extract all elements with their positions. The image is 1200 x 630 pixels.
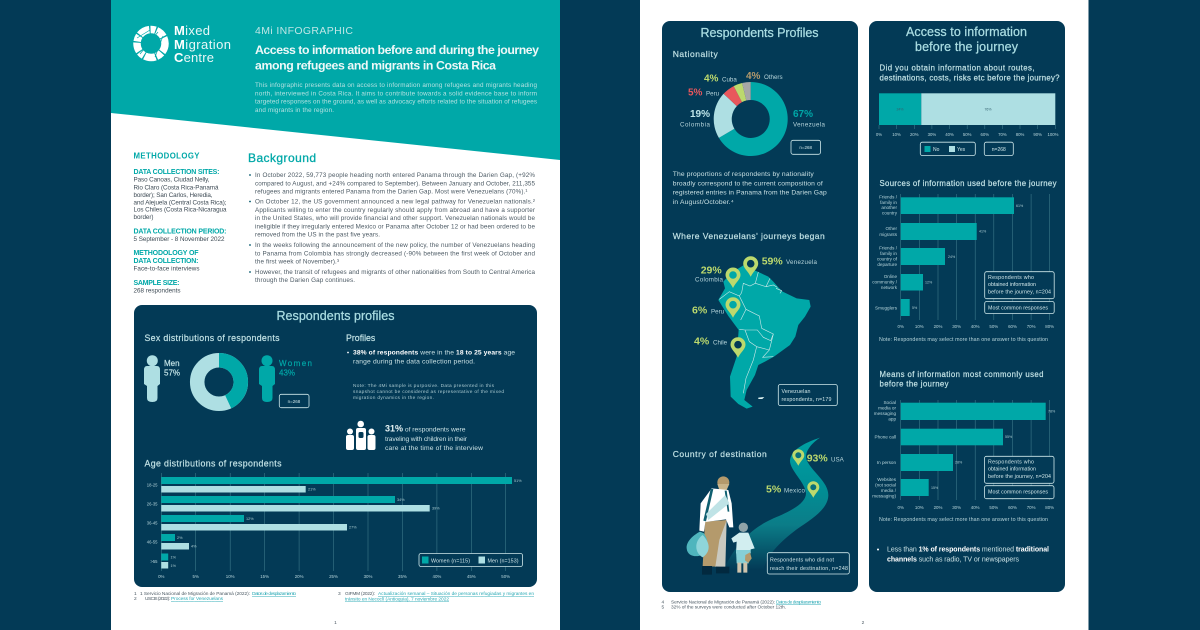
sample box: n=268: [799, 145, 813, 150]
sample note: migration dynamics in the region.: [353, 395, 434, 401]
sources chart: family in: [880, 200, 897, 205]
methodology: 268 respondents: [134, 288, 180, 294]
background bullets: Applicants willing to enter the country regularly should apply from abroad and have a supporter: [255, 207, 535, 214]
profiles bullet: 38% of respondents were in the 18 to 25 years age: [353, 350, 515, 356]
age chart: 30%: [364, 574, 372, 579]
destination labels: Mexico: [784, 488, 806, 494]
icon: man: [144, 355, 160, 402]
sources chart: 50%: [989, 324, 998, 329]
logo: Centre: [174, 50, 214, 65]
age chart: 39%: [432, 506, 440, 510]
map labels: 6%: [692, 304, 708, 316]
means chart: 80%: [1045, 505, 1054, 510]
means callouts: before the journey, n=204: [988, 474, 1051, 480]
sex distribution heading: Sex distributions of respondents: [144, 333, 280, 343]
age chart: 26-35: [147, 502, 158, 506]
stacked bar chart: 90%: [1033, 132, 1042, 137]
sources chart: 61%: [1016, 204, 1024, 208]
methodology: DATA COLLECTION SITES:: [134, 169, 220, 176]
means chart: 70%: [1027, 505, 1036, 510]
nationality labels: 4%: [746, 71, 761, 82]
logo: Migration: [174, 37, 231, 52]
sources chart: 20%: [934, 324, 942, 329]
age heading: Age distributions of respondents: [144, 458, 282, 468]
stacked bar chart: 30%: [928, 132, 936, 137]
background heading: Background: [248, 151, 316, 165]
map pins: [726, 256, 758, 358]
means chart: 55%: [1005, 435, 1013, 439]
age chart: 36-45: [147, 520, 158, 526]
footnotes page 2: Servicio Nacional de Migración de Panamá (2022):: [671, 600, 775, 606]
stacked bar chart: 24%: [896, 108, 904, 112]
panel title: [906, 25, 1027, 54]
intro text: and migrants in the region.: [255, 107, 334, 114]
sources chart: Other: [886, 226, 897, 231]
means note: Note: Respondents may select more than one answer to this question: [879, 517, 1048, 523]
means chart: 10%: [915, 505, 924, 510]
sources chart: Online: [884, 274, 897, 279]
means chart: Social: [883, 400, 896, 405]
destination sample box: reach their destination, n=248: [770, 566, 848, 572]
destination sample box: Respondents who did not: [770, 558, 835, 564]
logo: [137, 23, 231, 65]
header banner: [111, 0, 560, 160]
background bullets: ineligible if they irregularly entered Mexico or Panama after October 12 or had been ordered to be: [255, 223, 535, 230]
nationality labels: 19%: [690, 109, 710, 120]
footnotes page 2: 4: [662, 600, 664, 606]
means chart: messaging: [874, 411, 896, 416]
footnotes page 1: Datos de desplazamiento: [252, 591, 296, 597]
methodology: METHODOLOGY OF: [134, 250, 199, 257]
map labels: Venezuela: [786, 259, 818, 266]
map sample box: Venezuelan: [782, 389, 811, 395]
methodology: SAMPLE SIZE:: [134, 280, 180, 287]
age legend: [419, 554, 522, 566]
age chart: 50%: [501, 574, 510, 579]
destination labels: USA: [831, 456, 845, 464]
destination heading: Country of destination: [673, 449, 767, 459]
age chart: 40%: [433, 574, 441, 579]
children statistic: traveling with children in their: [385, 436, 468, 443]
age chart: 0%: [158, 574, 165, 579]
journeys heading: Where Venezuelans' journeys began: [673, 231, 825, 241]
sources chart: another: [881, 205, 897, 210]
means heading: before the journey: [880, 380, 949, 388]
means chart: In person: [877, 460, 896, 465]
age chart: 1%: [170, 556, 177, 560]
stacked bar chart: 0%: [876, 132, 882, 137]
report label: 4Mi INFOGRAPHIC: [255, 25, 353, 37]
background bullets: compared to August, and +24% compared to September). Between January and October, 211,355: [255, 180, 535, 188]
women label: Women: [279, 359, 312, 368]
sources chart: 12%: [925, 280, 933, 284]
means callouts: obtained information: [988, 466, 1036, 472]
page number 1: 1: [334, 620, 337, 626]
sources callouts: before the journey, n=204: [988, 290, 1051, 296]
map labels: Colombia: [695, 276, 724, 284]
page 1: [111, 0, 560, 630]
means chart: media /: [881, 488, 897, 493]
sample note: snapshot cannot be considered as representative of the mixed: [353, 389, 504, 395]
traditional channels bullet: Less than 1% of respondents mentioned traditional: [887, 546, 1049, 554]
means chart: media or: [878, 406, 896, 410]
age chart: 51%: [514, 479, 522, 483]
nationality labels: [680, 71, 826, 128]
sample box: n=268: [288, 399, 301, 404]
means chart: messaging): [872, 494, 896, 498]
map labels: Chile: [713, 340, 728, 346]
map labels: [692, 256, 818, 348]
background bullets: In the weeks following the announcement of the new policy, the number of Venezuelans heading: [255, 242, 535, 249]
age chart: 34%: [397, 498, 405, 502]
sources callouts: Respondents who: [988, 275, 1034, 281]
means chart: Phone call: [875, 434, 896, 440]
destination labels: 5%: [766, 484, 782, 496]
panel: access to information: [869, 21, 1065, 592]
footnotes page 2: Datos de desplazamiento: [776, 600, 821, 606]
nationality labels: Venezuela: [793, 122, 826, 128]
means chart: 50%: [989, 505, 998, 510]
intro text: This infographic presents data on access to information among refugees and migrants heading: [255, 82, 537, 89]
age chart: 2%: [177, 536, 183, 540]
map labels: 59%: [762, 256, 783, 268]
road illustration: [723, 438, 828, 570]
age chart: 1%: [170, 564, 177, 568]
age chart: 25%: [329, 574, 338, 579]
panel title: Access to information: [906, 25, 1027, 39]
sources chart: 10%: [915, 324, 924, 329]
donut: nationality: [714, 82, 788, 156]
men label: Men: [164, 359, 180, 368]
footnotes page 1: 3: [338, 591, 341, 597]
panel: respondents profiles left: [662, 21, 858, 592]
page number 2: 2: [862, 620, 865, 626]
map sample box: respondents, n=179: [782, 397, 832, 403]
age chart: 45%: [467, 574, 476, 579]
methodology: METHODOLOGY: [134, 152, 200, 160]
profiles bullet: [347, 350, 515, 366]
nationality paragraph: [673, 171, 827, 206]
sample box: [279, 394, 309, 408]
stacked bar chart: 20%: [910, 132, 919, 137]
footnotes page 1: [134, 591, 534, 602]
traditional channels bullet: channels such as radio, TV or newspapers: [887, 556, 1020, 563]
means heading: Means of information most commonly used: [880, 370, 1044, 379]
sources chart: 80%: [1045, 324, 1054, 329]
age chart: 27%: [349, 526, 357, 530]
nationality paragraph: registered entries in Panama from the Darien Gap: [673, 190, 827, 196]
methodology: border): [134, 214, 154, 221]
logo: Mixed: [174, 23, 210, 38]
footnotes page 2: 32% of the surveys were conducted after October 12th.: [671, 604, 786, 610]
icon: woman: [259, 355, 275, 402]
background bullets: in the United States, who will provide financial and other support. Venezuelan nationals would be: [255, 215, 535, 222]
sample note: [353, 383, 504, 401]
nationality labels: Colombia: [680, 122, 711, 128]
age chart: 46-55: [147, 540, 158, 544]
map labels: 29%: [701, 264, 722, 276]
age chart: 15%: [260, 574, 269, 579]
children statistic: care at the time of the interview: [385, 445, 483, 452]
sample note: Note: The 4Mi sample is purposive. Data presented in this: [353, 383, 495, 389]
sources chart: network: [881, 285, 898, 290]
sources chart: family in: [880, 251, 897, 256]
sources chart: migrants: [879, 232, 898, 237]
sources chart: 40%: [971, 324, 980, 329]
children statistic: 31% of respondents were: [385, 424, 466, 434]
means chart: 60%: [1008, 505, 1017, 510]
footnotes page 1: GIFMM (2022):: [345, 591, 375, 597]
means chart: 78%: [1048, 410, 1056, 414]
means callouts: Most common responses: [988, 490, 1048, 496]
means chart: (not social: [875, 482, 896, 488]
question: Did you obtain information about routes,: [880, 64, 1034, 72]
panel title: before the journey: [915, 40, 1019, 54]
means heading: [880, 370, 1044, 388]
sources chart: Smugglers: [875, 306, 898, 310]
title: [255, 43, 539, 72]
stacked bar chart: 100%: [1048, 132, 1059, 137]
sources note: Note: Respondents may select more than one answer to this question: [879, 337, 1048, 343]
panel title: Respondents Profiles: [700, 26, 818, 40]
methodology: DATA COLLECTION PERIOD:: [134, 228, 226, 236]
title: among refugees and migrants in Costa Rica: [255, 58, 496, 72]
footnotes page 2: 5: [662, 604, 664, 610]
footnotes page 1: USCIS (2022):: [145, 596, 170, 602]
methodology: and Alejuela (Central Costa Rica);: [134, 199, 227, 206]
sources chart: country of: [877, 256, 898, 262]
panel title: Respondents profiles: [276, 309, 394, 323]
means chart: 28%: [955, 460, 963, 464]
destination labels: [766, 452, 845, 496]
sample box: [984, 142, 1013, 156]
background bullets: [249, 172, 535, 284]
means chart: 30%: [952, 505, 961, 510]
stacked bar chart: [876, 93, 1059, 137]
illustration: adult and child: [687, 476, 755, 575]
nationality heading: Nationality: [673, 49, 718, 59]
footnotes page 1: 2: [134, 596, 137, 602]
methodology: DATA COLLECTION:: [134, 258, 198, 265]
means callouts: [984, 456, 1054, 499]
map labels: 4%: [694, 336, 710, 348]
sources chart: 30%: [952, 324, 961, 329]
age chart: >55: [150, 559, 158, 564]
sources chart: departure: [877, 262, 897, 267]
methodology: Rio Claro (Costa Rica-Panamá: [134, 184, 219, 191]
icon: family: [346, 421, 376, 450]
means chart: 20%: [934, 505, 942, 510]
background bullets: refugees and migrants entered Panama from the Darien Gap. Most were Venezuelans (70%).¹: [255, 188, 528, 196]
sources chart: community /: [872, 280, 898, 284]
sources callouts: obtained information: [988, 282, 1036, 288]
destination pins: [792, 449, 819, 498]
sources chart: [872, 194, 1054, 329]
background bullets: However, the transit of refugees and migrants of other nationalities from South to Central America: [255, 269, 535, 276]
question: destinations, costs, risks etc before the journey?: [880, 74, 1060, 82]
men label: [164, 359, 180, 378]
means chart: 40%: [971, 505, 980, 510]
nationality labels: Others: [764, 74, 783, 81]
age chart: 21%: [308, 488, 316, 492]
age chart: 4%: [191, 544, 197, 548]
sample box: n=268: [992, 147, 1006, 153]
children statistic: [385, 424, 483, 452]
methodology: Los Chiles (Costa Rica-Nicaragua: [134, 207, 227, 214]
sources chart: 24%: [948, 255, 956, 259]
age chart: 5%: [193, 574, 199, 579]
stacked bar chart: 60%: [980, 132, 989, 137]
footnotes page 2: [662, 600, 821, 610]
nationality paragraph: broadly correspond to the current composition of: [673, 180, 823, 188]
background bullets: On October 12, the US government announced a new legal pathway for Venezuelan nationals.²: [255, 198, 535, 206]
legend: Yes: [957, 147, 966, 153]
women label: [279, 359, 312, 378]
sources chart: 70%: [1027, 324, 1036, 329]
means chart: Websites: [877, 477, 897, 482]
age chart: 35%: [398, 574, 407, 579]
age chart: [147, 473, 522, 579]
means callouts: Respondents who: [988, 460, 1034, 466]
destination sample box: [767, 553, 849, 574]
stacked bar chart: 10%: [892, 132, 901, 137]
title: Access to information before and during the journey: [255, 43, 539, 57]
women label: 43%: [279, 368, 295, 378]
age legend: Men (n=153): [488, 558, 519, 564]
sources chart: country: [882, 210, 898, 216]
nationality labels: 67%: [793, 109, 813, 120]
question: [880, 64, 1060, 82]
donut: sex: [197, 360, 241, 404]
age chart: 12%: [246, 517, 254, 521]
sources callouts: Most common responses: [988, 306, 1048, 312]
page 2: [640, 0, 1088, 630]
traditional channels bullet: [877, 546, 1049, 563]
men label: 57%: [164, 368, 180, 378]
nationality labels: Peru: [706, 90, 720, 98]
sources chart: 5%: [912, 306, 918, 310]
panel: respondents profiles: [134, 305, 537, 587]
sources chart: Friends /: [879, 194, 898, 200]
footnotes page 1: 1 Servicio Nacional de Migración de Panamá (2022):: [140, 591, 250, 597]
means chart: 15%: [931, 486, 939, 490]
stacked bar chart: 80%: [1016, 132, 1024, 137]
destination labels: 93%: [807, 452, 828, 464]
stacked bar chart: 40%: [945, 132, 954, 137]
means chart: app: [888, 416, 896, 422]
age chart: 20%: [295, 574, 304, 579]
footnotes page 1: Actualización semanal – Situación de personas refugiadas y migrantes en: [378, 591, 534, 597]
footnotes page 1: tránsito en Necoclí (Antioquia), 7 noviembre 2022: [345, 596, 449, 602]
intro text: targeted responses on the ground, as well as advocacy efforts related to the situation of refugees: [255, 98, 537, 106]
legend: No: [933, 147, 940, 153]
background bullets: removed from the US in the past five years.: [255, 232, 380, 238]
methodology: [134, 152, 227, 294]
methodology: Face-to-face interviews: [134, 266, 200, 272]
sources callouts: [985, 272, 1054, 314]
legend: [920, 142, 975, 156]
footnotes page 1: 1: [134, 591, 137, 597]
sources chart: 60%: [1008, 324, 1017, 329]
methodology: border); San Carlos, Heredia,: [134, 192, 213, 199]
background bullets: to Panama from Colombia has strongly decreased (-90% between the first week of October and: [255, 250, 535, 257]
intro text: north, interviewed in Costa Rica. It aims to contribute towards a solid evidence base to inform: [255, 90, 537, 98]
sample box: [791, 140, 820, 154]
profiles heading: Profiles: [346, 333, 376, 343]
nationality labels: Cuba: [722, 76, 737, 84]
stacked bar chart: 50%: [963, 132, 972, 137]
sources heading: Sources of information used before the journey: [880, 179, 1057, 188]
age legend: Women (n=115): [431, 558, 470, 564]
background bullets: In October 2022, 59,773 people heading north entered Panama through the Darien Gap, (+92%: [255, 172, 535, 179]
nationality labels: 5%: [688, 88, 703, 98]
sources chart: 0%: [898, 324, 904, 329]
means chart: 0%: [898, 505, 904, 510]
nationality paragraph: in August/October.⁴: [673, 199, 734, 206]
means chart: [872, 400, 1056, 510]
sources chart: 41%: [979, 230, 987, 234]
sources chart: Friends /: [879, 246, 898, 250]
methodology: 5 September - 8 November 2022: [134, 236, 225, 243]
map sample box: [778, 384, 837, 406]
intro text: [255, 82, 537, 114]
profiles bullet: range during the data collection period.: [353, 358, 475, 366]
nationality labels: 4%: [704, 74, 719, 84]
background bullets: the first week of November).³: [255, 258, 339, 266]
stacked bar chart: 76%: [984, 108, 992, 112]
map: South America: [718, 265, 811, 409]
age chart: 10%: [226, 574, 235, 579]
methodology: Paso Canoas, Ciudad Nelly,: [134, 176, 210, 184]
footnotes page 1: Process for Venezuelans: [171, 596, 224, 602]
background bullets: through the Darien Gap continues.: [255, 277, 355, 284]
nationality paragraph: The proportions of respondents by nationality: [673, 171, 814, 178]
stacked bar chart: 70%: [998, 132, 1007, 137]
map labels: Peru: [711, 308, 725, 316]
age chart: 18-25: [147, 482, 158, 488]
